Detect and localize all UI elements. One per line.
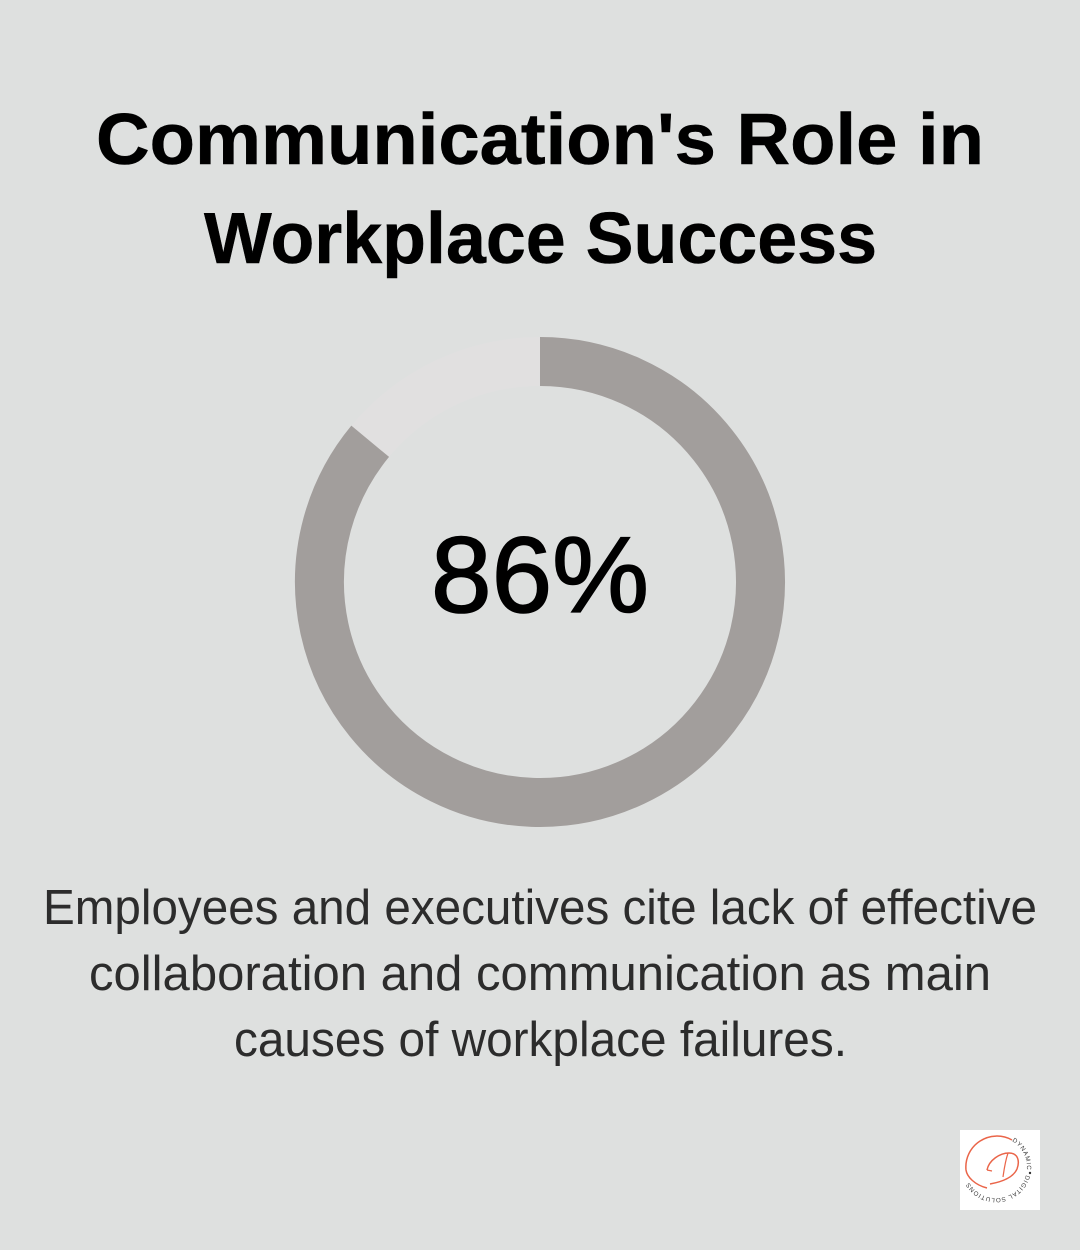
title: Communication's Role in [96, 100, 984, 180]
logo: Dynamic Digital Solutions [960, 1130, 1040, 1210]
donut chart: 86% [319, 362, 760, 802]
logo: Dynamic Digital Solutions: DIGITAL SOLUTIONS [966, 1176, 1030, 1202]
title: Workplace Success [204, 199, 877, 279]
description text: causes of workplace failures. [234, 1013, 847, 1067]
description text [43, 881, 1037, 1067]
description text: collaboration and communication as main [89, 947, 991, 1001]
description text: Employees and executives cite lack of effective [43, 881, 1037, 935]
donut value: 86% [431, 514, 649, 635]
logo: Dynamic Digital Solutions: DYNAMIC [1012, 1138, 1032, 1170]
title [96, 100, 984, 279]
